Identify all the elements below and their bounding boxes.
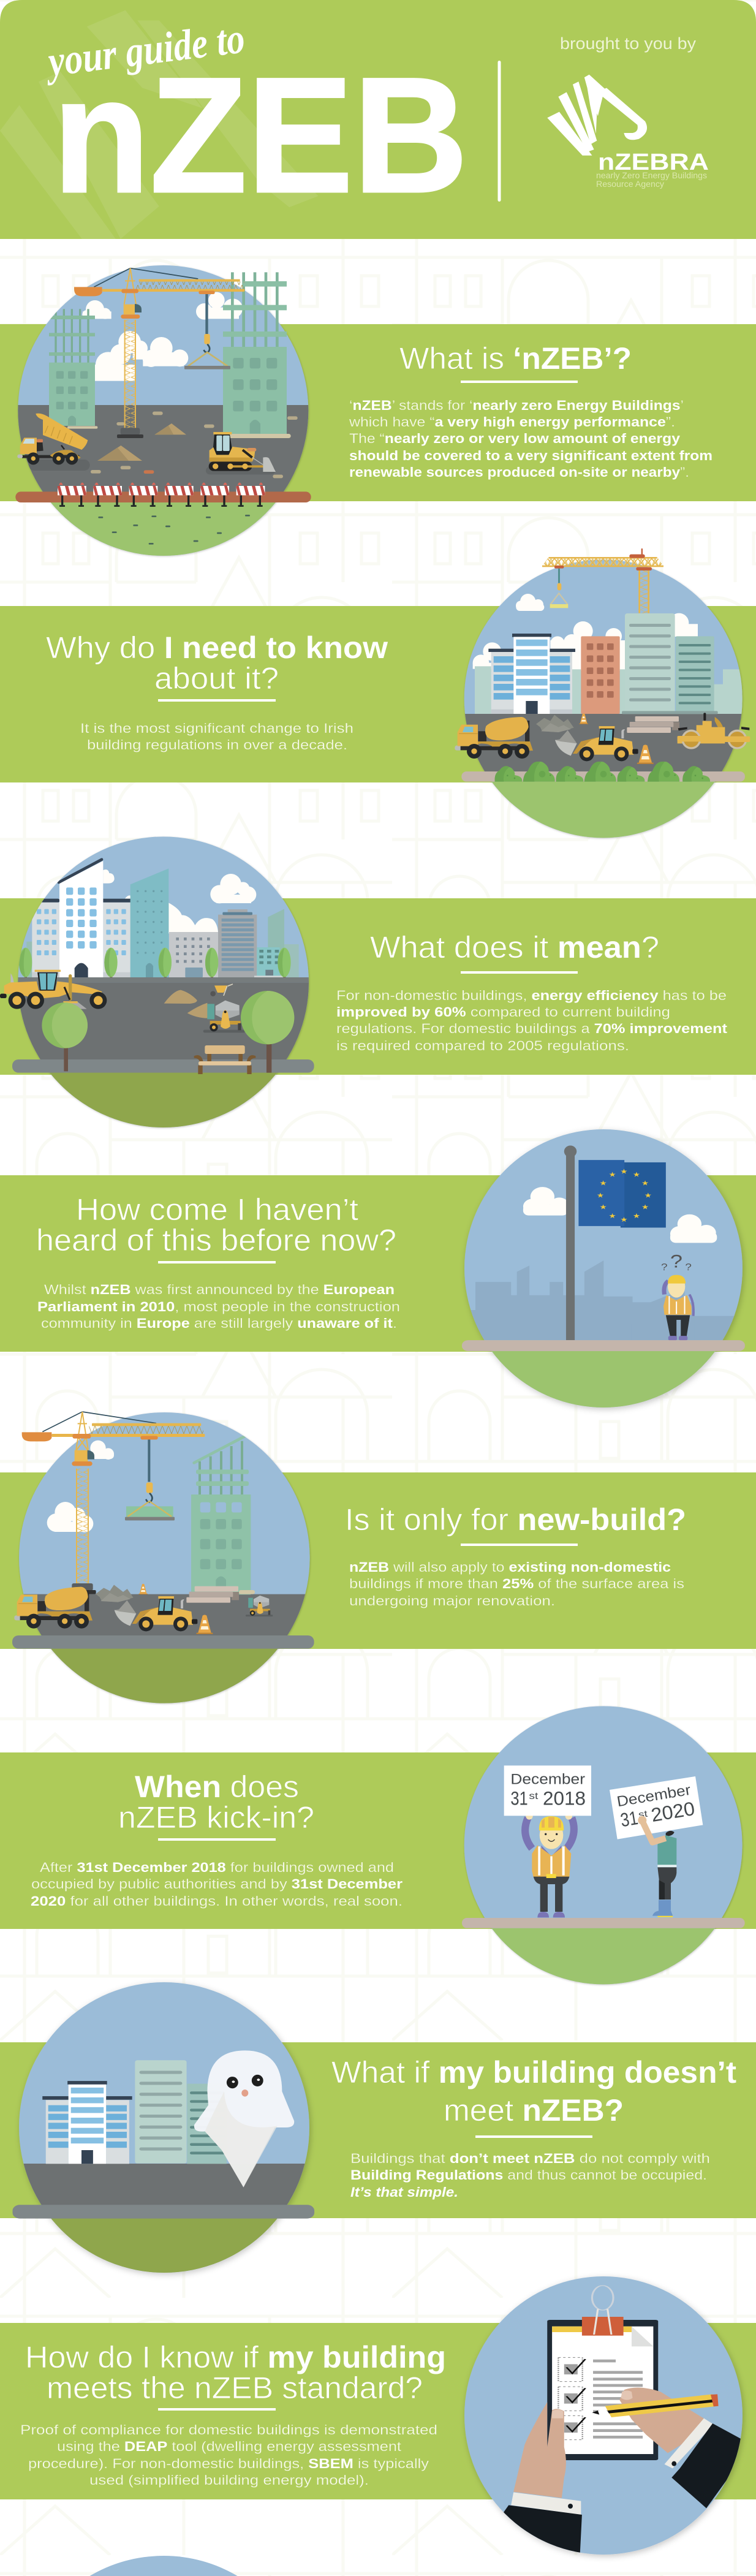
ghost (194, 2050, 294, 2188)
body text: building regulations in over a decade. (87, 737, 347, 752)
heading: nZEB kick-in? (118, 1800, 314, 1835)
panel: what is nZEB (0, 265, 756, 563)
body text: buildings if more than 25% of the surface area is (349, 1576, 684, 1591)
heading: When does (135, 1770, 299, 1804)
sign: December 31st 2020: December (616, 1782, 692, 1810)
EU flag: ★ (597, 1192, 604, 1199)
heading: about it? (154, 661, 279, 695)
heading (46, 631, 388, 695)
EU flag: ★ (620, 1216, 627, 1224)
panel: why do I need to know (0, 548, 756, 843)
stones, cones and slabs (96, 1584, 239, 1603)
small cement mixer (246, 1596, 273, 1616)
right worker (652, 1831, 676, 1917)
body text: After 31st December 2018 for buildings owned and (40, 1860, 394, 1875)
illustration: workers holding date signs (453, 1706, 754, 1990)
road roller (678, 713, 750, 749)
sign: December 31st 2018 (504, 1765, 591, 1816)
crane (74, 268, 244, 438)
body text: 2020 for all other buildings. In other words, real soon. (31, 1893, 403, 1909)
EU flag: ★ (641, 1203, 649, 1211)
panel: header (0, 0, 756, 239)
logo: nZEBRA: nZEBRA (598, 150, 709, 175)
body text: improved by 60% compared to current building (336, 1004, 670, 1020)
heading: meets the nZEB standard? (47, 2371, 423, 2405)
body text (20, 2422, 437, 2488)
body text: should be covered to a very significant extent from (349, 448, 713, 463)
heading: heard of this before now? (36, 1223, 396, 1257)
illustration: crane and building frame (0, 1412, 327, 1708)
body text: community in Europe are still largely unaware of it . (41, 1316, 397, 1331)
body text: It is the most significant change to Irish (80, 721, 353, 736)
kerb (12, 1059, 314, 1073)
green band (0, 606, 756, 782)
heading: How come I haven’t (76, 1192, 358, 1227)
green band (0, 1752, 756, 1929)
right hand with pencil (592, 2388, 752, 2508)
body text: For non-domestic buildings, energy efficiency has to be (336, 988, 727, 1003)
body text: Buildings that don’t meet nZEB do not comply with (350, 2151, 710, 2166)
EU flag: ★ (608, 1171, 616, 1178)
body text (336, 988, 728, 1053)
concrete mixer truck (455, 717, 533, 759)
checklist (558, 2357, 643, 2440)
body text: It’s that simple. (350, 2184, 458, 2200)
body text: is required compared to 2005 regulations. (336, 1038, 629, 1053)
illustration: ghost building (12, 1982, 319, 2279)
green band (0, 324, 756, 501)
EU flag: ★ (633, 1171, 640, 1178)
sign: December 31st 2020 (610, 1776, 703, 1843)
EU flag: ★ (633, 1212, 640, 1220)
illustration: finished city street (0, 836, 327, 1134)
green band (0, 1472, 756, 1649)
heading: meet nZEB? (444, 2093, 624, 2127)
body text (349, 1559, 684, 1608)
heading: Is it only for new-build? (345, 1502, 686, 1537)
heading (25, 2340, 446, 2405)
kerb (462, 1340, 745, 1351)
sign: December 31st 2020: 2020 (649, 1798, 697, 1826)
bushes (495, 762, 710, 782)
panel: what does it mean (0, 836, 756, 1134)
body text: using the DEAP tool (dwelling energy assessment (57, 2439, 401, 2454)
heading: What does it mean? (370, 930, 659, 964)
sign: December 31st 2018: 2018 (543, 1788, 586, 1809)
left hand (504, 2402, 582, 2553)
logo: nZEBRA (547, 75, 709, 189)
body text: which have “ a very high energy performance ”. (349, 414, 675, 430)
EU flag: ★ (608, 1212, 616, 1220)
logo: nZEBRA: Resource Agency (596, 179, 664, 189)
EU flag: ★ (644, 1192, 652, 1199)
kerb (461, 771, 745, 782)
body text: Proof of compliance for domestic buildings is demonstrated (20, 2422, 437, 2438)
body text (350, 2151, 710, 2200)
body text (37, 1282, 400, 1331)
worker (663, 1275, 694, 1341)
sign: December 31st 2020: 31 (619, 1807, 640, 1831)
heading (331, 2055, 736, 2127)
kerb (462, 1918, 745, 1928)
panel: when does nZEB kick-in (0, 1706, 756, 1990)
panel: is it only for new-build (0, 1412, 756, 1708)
question marks: ? (685, 1262, 692, 1273)
heading (118, 1770, 314, 1835)
concrete mixer truck (14, 1587, 93, 1629)
text: brought to you by: brought to you by (560, 34, 697, 53)
sign: December 31st 2018: December (510, 1771, 585, 1788)
brown kerb (15, 491, 311, 502)
tipper truck (17, 414, 88, 464)
sign: December 31st 2020: st (638, 1809, 649, 1820)
bulldozer (209, 432, 276, 472)
body text (31, 1860, 403, 1909)
green band (0, 1175, 756, 1352)
body text: occupied by public authorities and by 31st December (31, 1876, 403, 1892)
sign: December 31st 2018: st (529, 1791, 539, 1801)
body text (349, 398, 713, 480)
kerb (12, 1635, 314, 1649)
green band (0, 2042, 756, 2218)
green band (0, 898, 756, 1075)
heading: How do I know if my building (25, 2340, 446, 2374)
body text: Whilst nZEB was first announced by the European (44, 1282, 395, 1297)
green band (0, 2323, 756, 2499)
body text: The “ nearly zero or very low amount of energy (349, 431, 681, 446)
body text: ‘nZEB ’ stands for ‘ nearly zero Energy Buildings ’ (349, 398, 684, 413)
body text: Parliament in 2010 , most people in the construction (37, 1299, 400, 1314)
wheel loader (115, 1596, 213, 1634)
body text: Building Regulations and thus cannot be occupied. (350, 2167, 707, 2183)
panel: how do I know if my building meets nZEB (0, 2276, 756, 2555)
illustration: construction site with crane (12, 265, 319, 563)
body text: nZEB will also apply to existing non-domestic (349, 1559, 671, 1575)
header background (0, 0, 756, 239)
body text: used (simplified building energy model). (89, 2472, 369, 2488)
stones and cone (536, 713, 679, 733)
illustration: hands with clipboard checklist (464, 2276, 752, 2555)
question marks: ? (670, 1251, 682, 1271)
panel: how come I haven't heard (0, 1129, 756, 1409)
body text: procedure). For non-domestic buildings, SBEM is typically (28, 2456, 429, 2471)
crane (22, 1412, 205, 1594)
EU flag: ★ (641, 1180, 649, 1187)
heading (36, 1192, 396, 1257)
question marks: ? (661, 1262, 667, 1273)
EU flag: ★ (600, 1203, 607, 1211)
sign: December 31st 2018: 31 (510, 1788, 528, 1809)
road barriers (58, 482, 265, 507)
panel: what if my building doesn't meet nZEB (0, 1982, 756, 2279)
question marks (661, 1251, 692, 1273)
body text (80, 721, 353, 752)
title: nZEB: nZEB (53, 43, 468, 227)
trees and bench (42, 991, 294, 1074)
crane (542, 548, 663, 613)
heading: What if my building doesn’t (331, 2055, 736, 2089)
EU flag (578, 1160, 666, 1227)
script title: your guide to: your guide to (42, 15, 248, 86)
left worker (525, 1813, 574, 1917)
wheel loader (555, 726, 654, 764)
body text: regulations. For domestic buildings a 70% improvement (336, 1021, 728, 1036)
EU flag: ★ (600, 1180, 607, 1187)
heading: Why do I need to know (46, 631, 388, 665)
heading: What is ‘nZEB’? (399, 341, 632, 376)
EU flag: ★ (620, 1168, 627, 1175)
body text: renewable sources produced on-site or nearby ”. (349, 464, 689, 480)
illustration: EU flag and puzzled worker (459, 1129, 747, 1409)
body text: undergoing major renovation. (349, 1593, 555, 1608)
next panel circle cut off at page bottom (89, 2556, 238, 2576)
logo: nZEBRA: nearly Zero Energy Buildings (596, 170, 707, 180)
motor grader (0, 970, 107, 1009)
illustration: city construction site (450, 548, 756, 843)
kerb (12, 2205, 314, 2219)
